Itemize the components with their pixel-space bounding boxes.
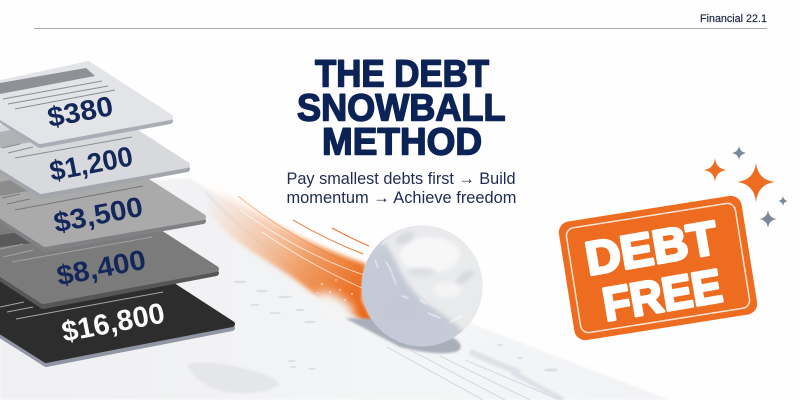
series label: Financial 22.1 xyxy=(700,13,767,25)
subtitle: Pay smallest debts first → Build xyxy=(286,169,516,188)
snowball motion streaks xyxy=(205,178,376,326)
card: $3,500: $3,500 xyxy=(51,191,145,238)
subtitle xyxy=(286,169,516,207)
title: SNOWBALL xyxy=(297,87,506,129)
card: $8,400: $8,400 xyxy=(54,244,148,291)
snowball xyxy=(362,224,486,346)
stack of debt cards xyxy=(0,64,232,364)
card: $16,800: $16,800 xyxy=(59,298,167,349)
debt free stamp xyxy=(557,194,759,342)
subtitle: momentum → Achieve freedom xyxy=(286,188,516,207)
card: $1,200: $1,200 xyxy=(47,140,135,187)
header rule xyxy=(34,28,767,29)
title: THE DEBT xyxy=(315,53,489,95)
title xyxy=(297,53,506,163)
card: $8,400 xyxy=(0,197,216,306)
card: $380: $380 xyxy=(45,90,116,133)
snowy slope xyxy=(0,178,670,400)
card: $3,500 xyxy=(0,152,203,249)
title: METHOD xyxy=(322,121,482,163)
debt free stamp: DEBT xyxy=(581,210,722,285)
sparkles xyxy=(703,146,788,228)
card: $16,800 xyxy=(0,245,232,364)
card: $380 xyxy=(0,64,170,145)
card: $1,200 xyxy=(0,106,187,196)
snowball shadow and tracks xyxy=(345,318,563,400)
debt free stamp: FREE xyxy=(599,259,726,331)
